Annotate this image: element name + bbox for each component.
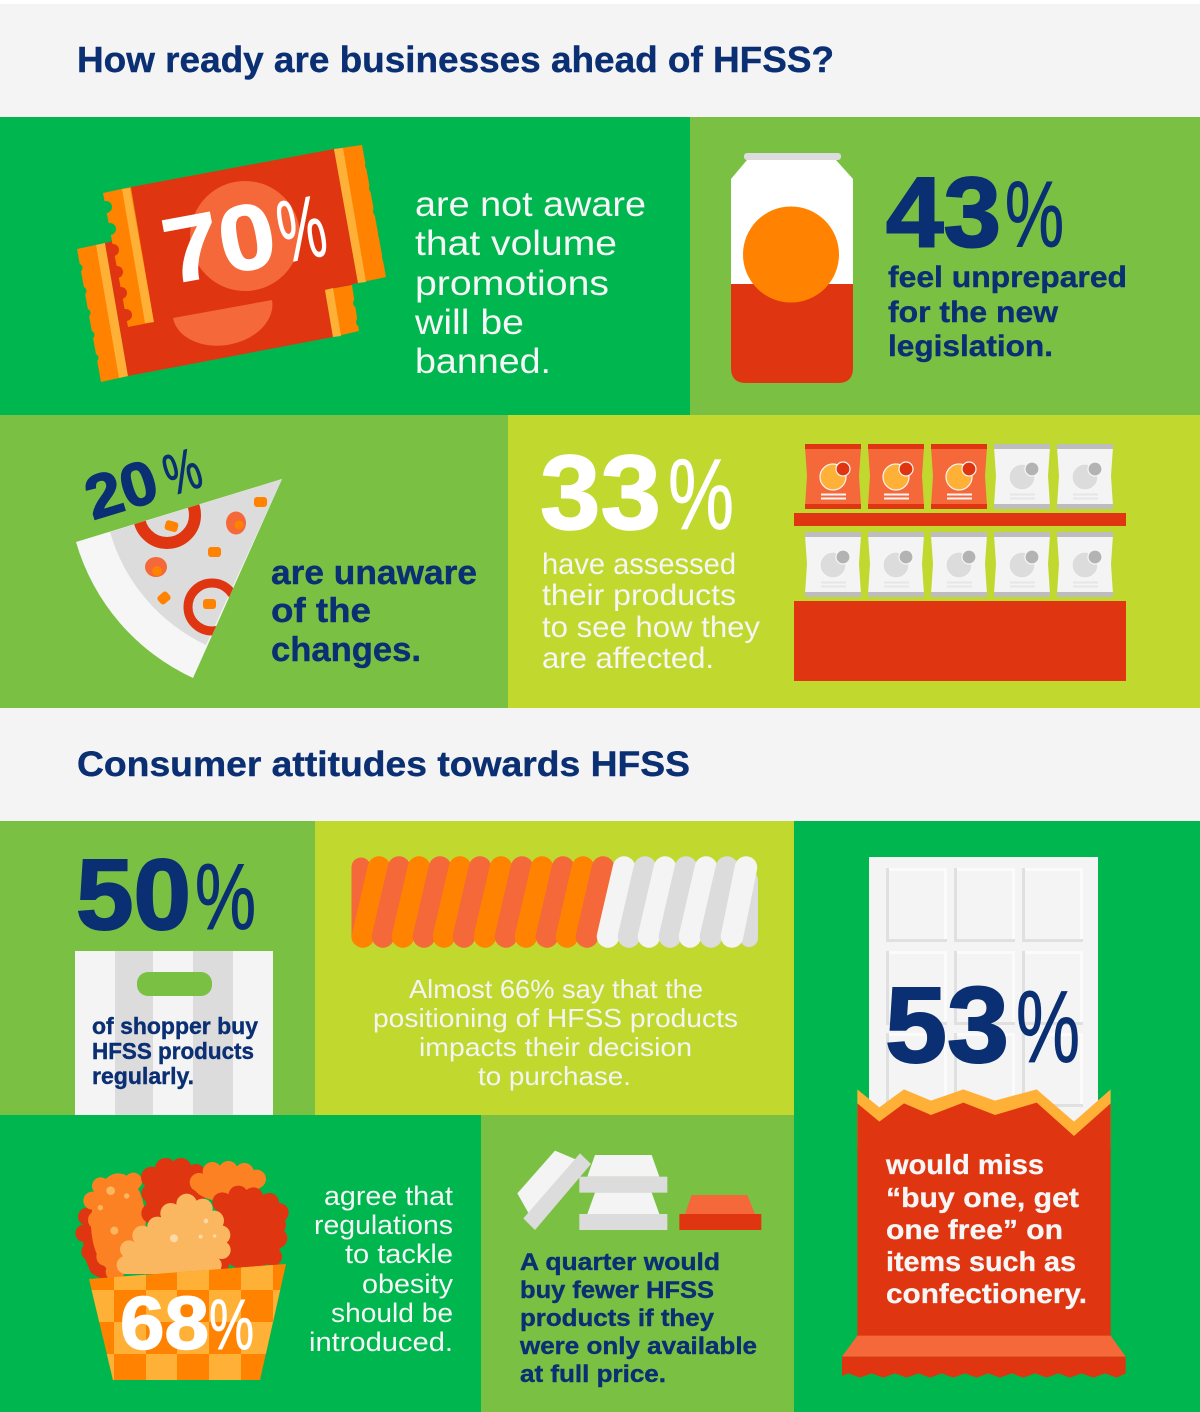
text: have assessed: their products bbox=[542, 579, 736, 612]
stat: 20 percent bbox=[77, 436, 209, 532]
text: have assessed: have assessed bbox=[542, 548, 736, 581]
text: would miss: one free” on bbox=[886, 1214, 1063, 1245]
text: feel unprepared: for the new bbox=[888, 296, 1059, 329]
icon: fried chicken bucket bbox=[75, 1158, 295, 1385]
chart: striped pill bar bbox=[361, 867, 749, 938]
stat: 33 percent: % bbox=[668, 439, 734, 551]
text: almost 66 percent: to purchase. bbox=[478, 1061, 631, 1091]
text: have assessed: to see how they bbox=[542, 611, 760, 644]
stat: 43 percent: % bbox=[1005, 162, 1064, 266]
stat: 68 percent bbox=[120, 1281, 254, 1365]
stat: 20 percent: % bbox=[156, 436, 209, 508]
icon: sweet wrapper tickets bbox=[74, 145, 394, 382]
stat: 50 percent: 50 bbox=[76, 839, 191, 951]
icon: shelf of snack bags bbox=[794, 444, 1126, 681]
stat: 50 percent bbox=[76, 839, 256, 951]
icon: stacked boxes bbox=[517, 1151, 761, 1230]
icon: pizza slice bbox=[76, 479, 282, 678]
text: would miss: would miss bbox=[885, 1149, 1044, 1180]
panel: 68 percent chicken bbox=[0, 1115, 481, 1412]
text: not aware: banned. bbox=[415, 342, 551, 381]
text: almost 66 percent: impacts their decision bbox=[419, 1032, 692, 1062]
icon: chocolate bar bbox=[869, 857, 1098, 1137]
icon: drink can bbox=[731, 153, 853, 383]
panel: a quarter boxes bbox=[481, 1115, 794, 1412]
text: a quarter would: A quarter would bbox=[520, 1249, 720, 1276]
stat: 50 percent: % bbox=[195, 844, 256, 949]
stat: 68 percent: 68 bbox=[120, 1281, 209, 1365]
text: of shopper buy bbox=[92, 1013, 258, 1089]
stat: 70 percent: 70 bbox=[155, 183, 284, 304]
text: have assessed: are affected. bbox=[542, 642, 714, 675]
panel: header how ready bbox=[0, 4, 1200, 117]
text: would miss: confectionery. bbox=[886, 1278, 1087, 1309]
panel: 33 percent shelf bbox=[508, 415, 1200, 708]
text: a quarter would: at full price. bbox=[520, 1361, 666, 1388]
panel: header consumer attitudes bbox=[0, 708, 1200, 821]
panel: 43 percent can bbox=[690, 117, 1200, 415]
text: not aware bbox=[414, 185, 646, 381]
icon: chocolate wrapper bbox=[842, 1089, 1126, 1378]
text: would miss bbox=[885, 1149, 1087, 1309]
stat: 33 percent: 33 bbox=[540, 434, 661, 552]
stat: 68 percent: % bbox=[209, 1286, 254, 1365]
text: not aware: are not aware bbox=[415, 185, 646, 224]
panel: 66 percent positioning bbox=[315, 821, 794, 1115]
text: not aware: that volume bbox=[415, 224, 617, 263]
text: of shopper buy: of shopper buy bbox=[92, 1013, 258, 1039]
stat: 20 percent: 20 bbox=[77, 446, 166, 532]
text: agree regulations: obesity bbox=[362, 1269, 454, 1299]
icon: shopping bag bbox=[75, 951, 273, 1115]
stat: 33 percent bbox=[540, 434, 734, 552]
stat: 43 percent: 43 bbox=[886, 156, 1001, 268]
stat: 43 percent bbox=[886, 156, 1064, 268]
text: a quarter would: were only available bbox=[519, 1333, 757, 1360]
text: would miss: items such as bbox=[886, 1246, 1076, 1277]
stat: 53 percent: 53 bbox=[885, 964, 1009, 1085]
text: agree regulations: should be bbox=[331, 1298, 453, 1328]
text: not aware: promotions bbox=[415, 264, 609, 303]
text: feel unprepared: legislation. bbox=[888, 330, 1053, 363]
text: a quarter would: products if they bbox=[520, 1305, 715, 1332]
text: agree regulations bbox=[309, 1181, 454, 1357]
text: a quarter would bbox=[519, 1249, 757, 1388]
stat: 70 percent: % bbox=[269, 176, 334, 282]
text: almost 66 percent bbox=[373, 974, 738, 1091]
text: not aware: will be bbox=[414, 303, 524, 342]
text: feel unprepared bbox=[888, 261, 1127, 363]
text: feel unprepared: feel unprepared bbox=[888, 261, 1127, 294]
text: are unaware: changes. bbox=[271, 631, 421, 669]
text: agree regulations: to tackle bbox=[345, 1239, 453, 1269]
panel: 20 percent pizza bbox=[0, 415, 508, 708]
panel: 50 percent bag bbox=[0, 821, 315, 1115]
text: would miss: “buy one, get bbox=[886, 1182, 1079, 1213]
stat: 70 percent bbox=[155, 176, 334, 304]
text: have assessed bbox=[542, 548, 760, 675]
panel: 53 percent chocolate bbox=[794, 821, 1200, 1412]
text: almost 66 percent: positioning of HFSS products bbox=[373, 1003, 738, 1033]
text: a quarter would: buy fewer HFSS bbox=[520, 1277, 714, 1304]
text: agree regulations: regulations bbox=[314, 1210, 453, 1240]
text: are unaware: of the bbox=[271, 592, 371, 630]
text: of shopper buy: HFSS products bbox=[92, 1038, 254, 1064]
stat: 53 percent bbox=[885, 964, 1080, 1085]
text: almost 66 percent: Almost 66% say that the bbox=[409, 974, 703, 1004]
heading: consumer attitudes: Consumer attitudes towards HFSS bbox=[77, 745, 690, 784]
text: are unaware: are unaware bbox=[271, 554, 477, 592]
text: agree regulations: agree that bbox=[324, 1181, 454, 1211]
stat: 53 percent: % bbox=[1016, 970, 1080, 1084]
text: of shopper buy: regularly. bbox=[92, 1063, 194, 1089]
text: agree regulations: introduced. bbox=[309, 1327, 453, 1357]
text: are unaware bbox=[271, 554, 477, 669]
heading: how ready are businesses: How ready are businesses ahead of HFSS? bbox=[77, 39, 834, 80]
panel: 70 percent ticket bbox=[0, 117, 690, 415]
